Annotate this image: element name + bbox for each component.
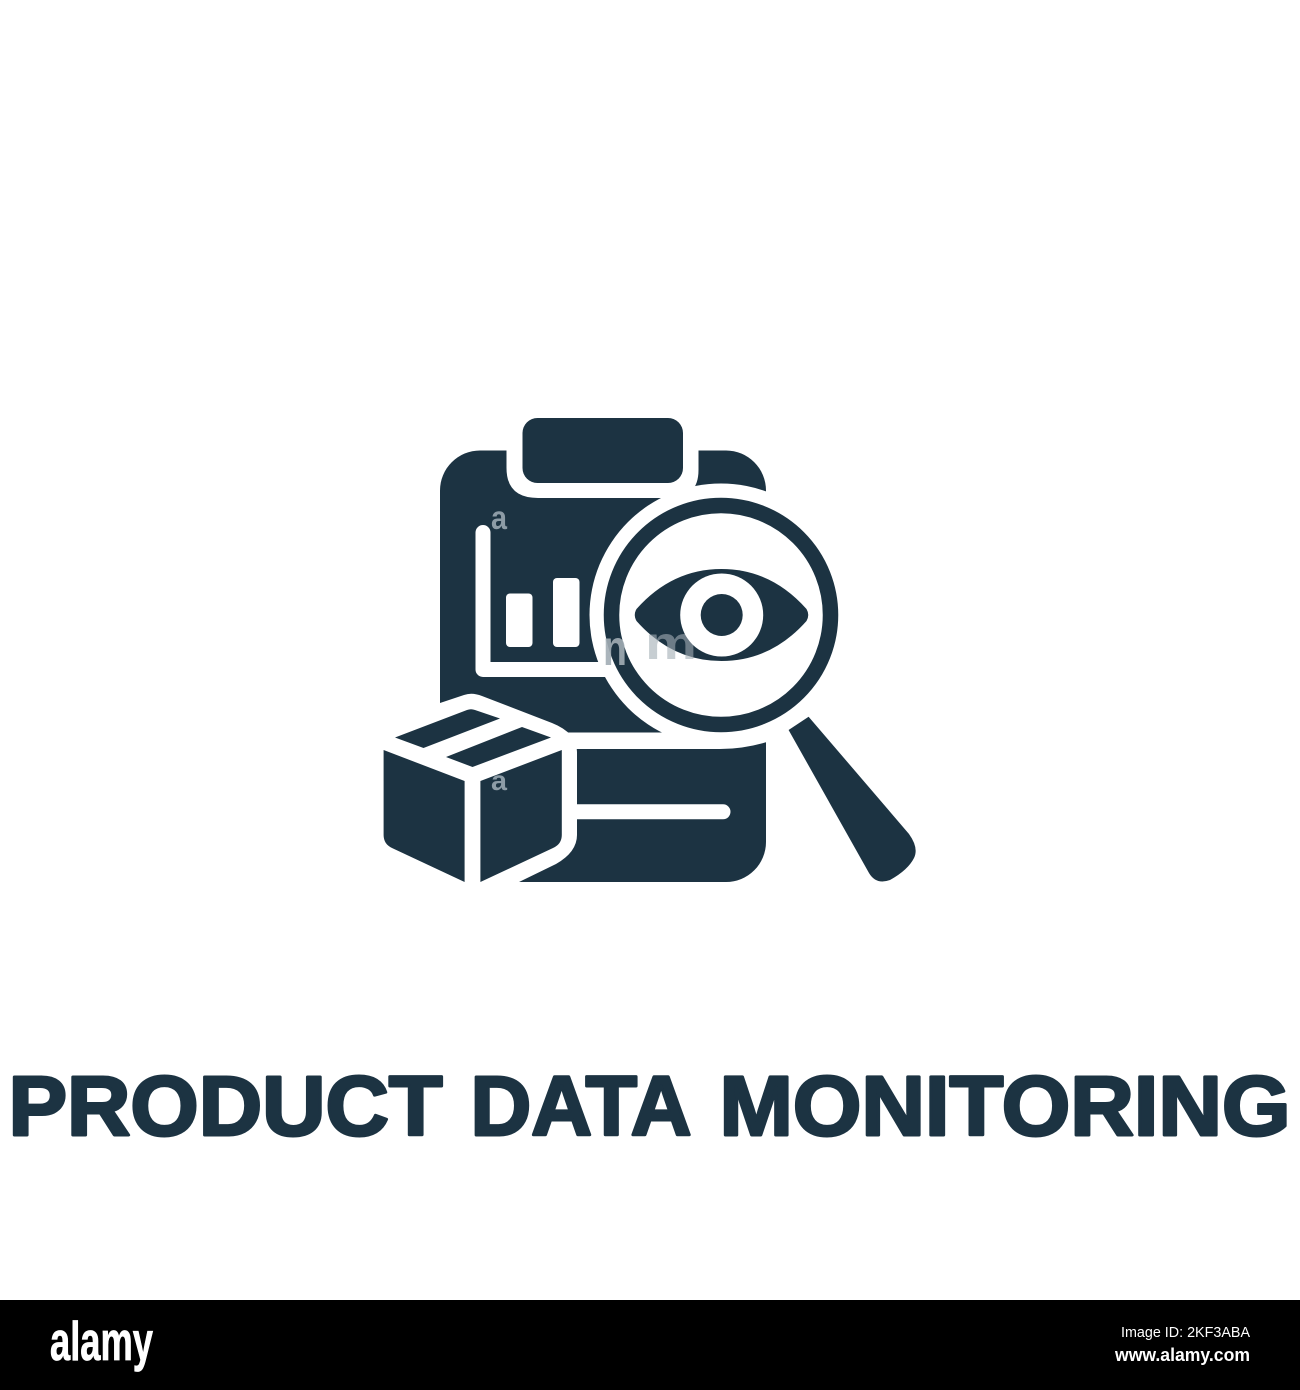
lower clipboard separator [540, 732, 770, 749]
eye outline [635, 569, 808, 661]
title [8, 1059, 1290, 1153]
footer bar [0, 1300, 1300, 1390]
watermark letter: a [491, 499, 508, 536]
icon: eye [635, 569, 808, 669]
icon: product data monitoring [370, 418, 916, 892]
watermark word fragment: n [603, 620, 627, 676]
bar chart [483, 532, 640, 670]
watermark letter on box: a [491, 765, 507, 796]
image id: Image ID: 2KF3ABA [1121, 1324, 1250, 1341]
box halo [370, 694, 577, 892]
chart axes [483, 532, 640, 670]
magnifier halo [590, 484, 852, 746]
clipboard tab [522, 418, 683, 483]
clipboard body [440, 450, 766, 882]
clipboard tab cutout [506, 440, 698, 498]
box tape lower strip [446, 727, 551, 767]
magnifier ring [612, 506, 830, 724]
box left face [384, 750, 465, 882]
title word: product: PRODUCT [8, 1059, 442, 1153]
box right face [480, 750, 562, 882]
magnifier handle [789, 717, 916, 881]
title word: data: DATA [470, 1059, 692, 1153]
clipboard text line [570, 804, 723, 819]
website: www.alamy.com [1114, 1345, 1250, 1365]
eye iris [680, 574, 763, 656]
icon: package box [384, 709, 562, 882]
watermark inside eye: m [645, 617, 697, 669]
alamy logo: alamy [50, 1310, 153, 1372]
eye pupil [701, 594, 743, 636]
title word: monitoring: MONITORING [720, 1059, 1290, 1153]
chart bars [506, 578, 580, 647]
box tape top strip [395, 709, 500, 748]
